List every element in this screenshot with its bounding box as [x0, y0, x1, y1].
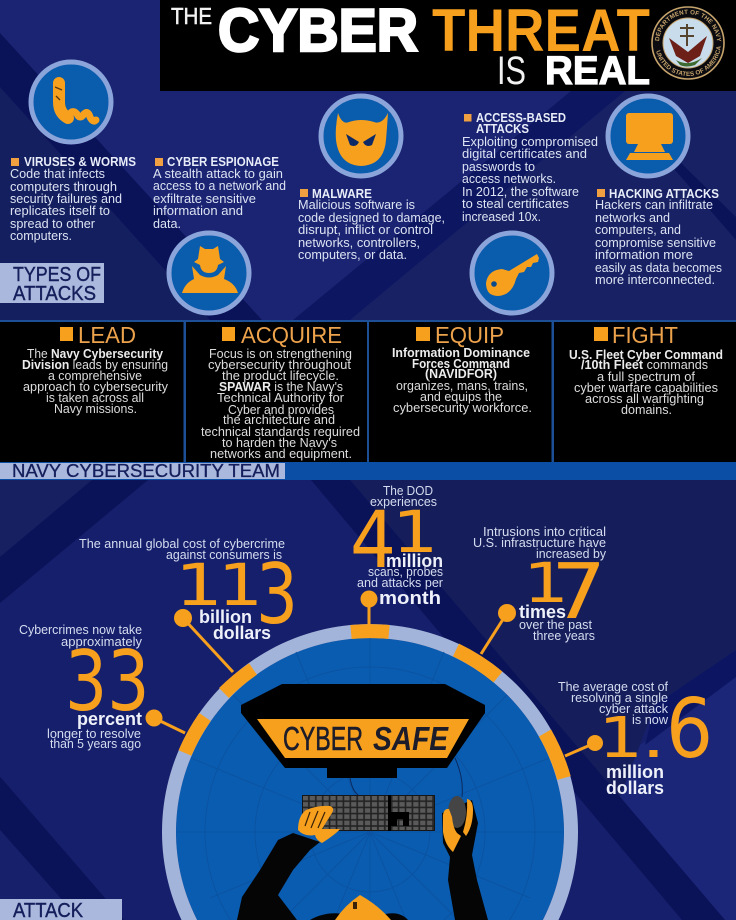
panel: acquire	[186, 322, 367, 462]
title banner	[160, 0, 736, 93]
text block: cyber espionage: exfiltrate sensitive	[153, 191, 256, 206]
panel: lead: Division leads by ensuring	[22, 358, 168, 372]
monitor	[241, 684, 485, 778]
heading: navy cybersecurity team: NAVY CYBERSECURITY TEAM	[12, 461, 280, 481]
panel: equip: cybersecurity workforce.	[393, 401, 532, 415]
stat: 1.6 million dollars: .	[641, 706, 666, 771]
stat: 1.6 million dollars: cyber attack	[599, 702, 669, 716]
text block: cyber espionage: access to a network and	[153, 178, 286, 193]
panel: acquire: to harden the Navy's	[222, 436, 337, 450]
stat: 41 million scans per month: scans, probes	[368, 565, 443, 579]
text block: viruses and worms: replicates itself to	[10, 203, 110, 218]
text block: hacking attacks: compromise sensitive	[595, 235, 716, 250]
text block: cyber espionage: information and	[153, 203, 243, 218]
text block: access-based attacks: Exploiting compromised	[462, 134, 598, 149]
arm and hand: left	[237, 806, 340, 920]
stat: 17 times over three years: Intrusions into critical	[483, 525, 606, 539]
background: upper navy field	[0, 0, 736, 322]
text block: malware: Malicious software is	[298, 197, 415, 212]
stat: 41 million scans per month: 4	[350, 496, 396, 586]
text block: hacking attacks: more interconnected.	[595, 272, 715, 287]
heading: types of attacks	[0, 263, 104, 305]
stat: 41 million scans per month: million	[386, 551, 443, 571]
text block: hacking attacks: computers, and	[595, 222, 681, 237]
head from above	[310, 895, 408, 920]
panel: fight: domains.	[621, 403, 672, 417]
illustration: cyber safe workstation dial	[162, 624, 578, 920]
icon: devil	[321, 96, 401, 176]
panel: acquire: cybersecurity throughout	[208, 358, 352, 372]
text block: access-based attacks: ACCESS-BASED	[476, 110, 566, 125]
icon: spy	[169, 233, 249, 313]
text block: hacking attacks: easily as data becomes	[595, 260, 722, 275]
heading: types of attacks: ATTACKS	[13, 283, 96, 305]
stat: annual cost 113 billion dollars: dollars	[213, 623, 271, 643]
stat: 33 percent longer to resolve: percent	[77, 709, 142, 729]
stat: 41 million scans per month: and attacks per	[357, 576, 443, 590]
icon: monitor	[608, 96, 688, 176]
stat: annual cost 113 billion dollars: 3	[256, 546, 298, 643]
arm, hand and mouse: right	[442, 796, 488, 920]
text block: malware: computers, or data.	[298, 247, 407, 262]
text block: access-based attacks	[462, 110, 598, 224]
text block: hacking attacks: information more	[595, 247, 693, 262]
panel: acquire: the product lifecycle.	[222, 369, 339, 383]
text block: hacking attacks	[595, 186, 722, 287]
text block: malware: networks, controllers,	[298, 235, 420, 250]
panel: lead: is taken across all	[46, 391, 144, 405]
stat: 33 percent longer to resolve: than 5 years ago	[50, 737, 141, 751]
text block: cyber espionage	[153, 154, 286, 231]
dial: ring and face	[162, 624, 578, 920]
stat: 33 percent longer to resolve: longer to resolve	[47, 727, 141, 741]
panel: fight	[554, 322, 736, 462]
panel: acquire: networks and equipment.	[210, 447, 352, 461]
stat: annual cost 113 billion dollars: billion	[199, 607, 252, 627]
stat: 1.6 million dollars: dollars	[606, 778, 664, 798]
panel: fight: cyber warfare capabilities	[574, 381, 718, 395]
panel: acquire: ACQUIRE	[241, 322, 342, 348]
panel: fight: FIGHT	[612, 322, 678, 348]
stat: 41 million scans per month: experiences	[370, 495, 437, 509]
heading: navy cybersecurity team	[0, 461, 736, 481]
panel: lead: The Navy Cybersecurity	[27, 347, 163, 361]
panel: acquire: Technical Authority for	[217, 391, 344, 405]
stat: 33 percent longer to resolve: approximately	[61, 635, 143, 649]
stat: 1.6 million dollars: million	[606, 762, 664, 782]
stat: 17 times over three years: times	[519, 602, 566, 622]
cables	[350, 758, 462, 797]
panel: acquire: technical standards required	[201, 425, 360, 439]
text block: viruses and worms	[10, 154, 136, 243]
title banner: IS	[497, 49, 526, 93]
stat: annual cost 113 billion dollars: against consumers is	[166, 548, 282, 562]
stat: 1.6 million dollars: The average cost of	[558, 680, 669, 694]
stat: 1.6 million dollars: 6	[666, 682, 713, 777]
panel: acquire: Cyber and provides	[228, 403, 334, 417]
panel: lead: LEAD	[78, 322, 136, 348]
panel: lead	[0, 322, 184, 462]
icon: department of the navy seal: UNITED STATES OF AMERICA	[656, 46, 721, 76]
panel: equip: and equips the	[420, 390, 502, 404]
panel: acquire: the architecture and	[223, 413, 335, 427]
panel: equip: EQUIP	[435, 322, 504, 348]
text block: access-based attacks: to steal certificates	[462, 196, 569, 211]
stat: annual cost 113 billion dollars: 1	[218, 551, 263, 619]
panel: acquire: SPAWAR is the Navy's	[219, 380, 343, 394]
panel: types of attacks	[0, 62, 722, 313]
stat: 17 times over three years	[473, 525, 607, 654]
stat: 33 percent longer to resolve: 33	[65, 633, 150, 730]
text block: malware: MALWARE	[312, 186, 372, 201]
text block: hacking attacks: Hackers can infiltrate	[595, 197, 713, 212]
stat: 33 percent longer to resolve: Cybercrimes now take	[19, 623, 142, 637]
icon: department of the navy seal: DEPARTMENT OF THE NAVY	[654, 10, 722, 42]
text block: access-based attacks: increased 10x.	[462, 209, 541, 224]
text block: access-based attacks: ATTACKS	[476, 121, 529, 136]
text block: cyber espionage: data.	[153, 216, 181, 231]
text block: viruses and worms: security failures and	[10, 191, 122, 206]
dial: orange markers	[185, 631, 564, 778]
stat: annual cost 113 billion dollars	[79, 537, 298, 672]
panel: equip	[369, 322, 552, 462]
title banner: THE	[171, 3, 212, 29]
text block: access-based attacks: In 2012, the software	[462, 184, 579, 199]
panel: lead: Navy missions.	[54, 402, 137, 416]
text block: access-based attacks: access networks.	[462, 171, 556, 186]
text block: hacking attacks: HACKING ATTACKS	[609, 186, 719, 201]
stat: 17 times over three years: U.S. infrastructure have	[473, 536, 606, 550]
heading: attack	[0, 899, 122, 920]
background: lower navy field	[0, 480, 736, 920]
monitor: CYBER	[283, 720, 363, 757]
panel: navy cybersecurity team	[0, 320, 736, 481]
stat: 41 million scans per month: The DOD	[383, 484, 433, 498]
text block: malware	[298, 186, 445, 262]
text block: viruses and worms: Code that infects	[10, 166, 105, 181]
panel: equip: (NAVIDFOR)	[425, 367, 497, 381]
text block: malware: disrupt, inflict or control	[298, 222, 433, 237]
stat: 1.6 million dollars: 1	[598, 706, 643, 771]
panel: equip: Information Dominance	[392, 346, 530, 360]
stat: annual cost 113 billion dollars: The annual global cost of cybercrime	[79, 537, 285, 551]
icon: department of the navy seal	[651, 6, 725, 80]
stat: 17 times over three years: increased by	[536, 547, 607, 561]
stat: 1.6 million dollars: resolving a single	[571, 691, 668, 705]
stat: 1.6 million dollars: is now	[632, 713, 669, 727]
text block: cyber espionage: A stealth attack to gain	[153, 166, 283, 181]
title banner: REAL	[545, 49, 650, 93]
stat: 17 times over three years: over the past	[519, 618, 593, 632]
text block: hacking attacks: networks and	[595, 210, 670, 225]
stat: 17 times over three years: three years	[533, 629, 595, 643]
monitor: SAFE	[373, 720, 449, 757]
panel: fight: U.S. Fleet Cyber Command	[569, 348, 723, 362]
text block: access-based attacks: passwords to	[462, 159, 535, 174]
stat: 1.6 million dollars	[558, 680, 713, 798]
stat: 17 times over three years: 1	[523, 551, 569, 615]
text block: viruses and worms: computers through	[10, 179, 117, 194]
stat: annual cost 113 billion dollars: 1	[175, 551, 223, 619]
icon: key	[472, 233, 552, 313]
stat: 41 million scans per month	[350, 484, 443, 626]
panel: fight: /10th Fleet commands	[581, 358, 708, 372]
stat: 41 million scans per month: month	[379, 588, 441, 608]
keyboard	[302, 795, 435, 831]
panel: equip: Forces Command	[412, 357, 510, 371]
panel: acquire: Focus is on strengthening	[209, 347, 352, 361]
text block: cyber espionage: CYBER ESPIONAGE	[167, 154, 279, 169]
text block: viruses and worms: spread to other	[10, 216, 96, 231]
text block: access-based attacks: digital certificates and	[462, 146, 587, 161]
icon: worm	[31, 62, 111, 142]
panel: lead: approach to cybersecurity	[23, 380, 169, 394]
panel: equip: organizes, mans, trains,	[396, 379, 528, 393]
text block: malware: code designed to damage,	[298, 210, 445, 225]
panel: fight: a full spectrum of	[597, 370, 696, 384]
stat: 17 times over three years: 7	[551, 548, 606, 637]
text block: viruses and worms: VIRUSES & WORMS	[24, 154, 136, 169]
stat: 33 percent longer to resolve	[19, 623, 185, 751]
heading: types of attacks: TYPES OF	[13, 264, 101, 286]
panel: fight: across all warfighting	[585, 392, 704, 406]
text block: viruses and worms: computers.	[10, 228, 72, 243]
panel: lead: a comprehensive	[48, 369, 142, 383]
stat: 41 million scans per month: 1	[392, 498, 438, 566]
